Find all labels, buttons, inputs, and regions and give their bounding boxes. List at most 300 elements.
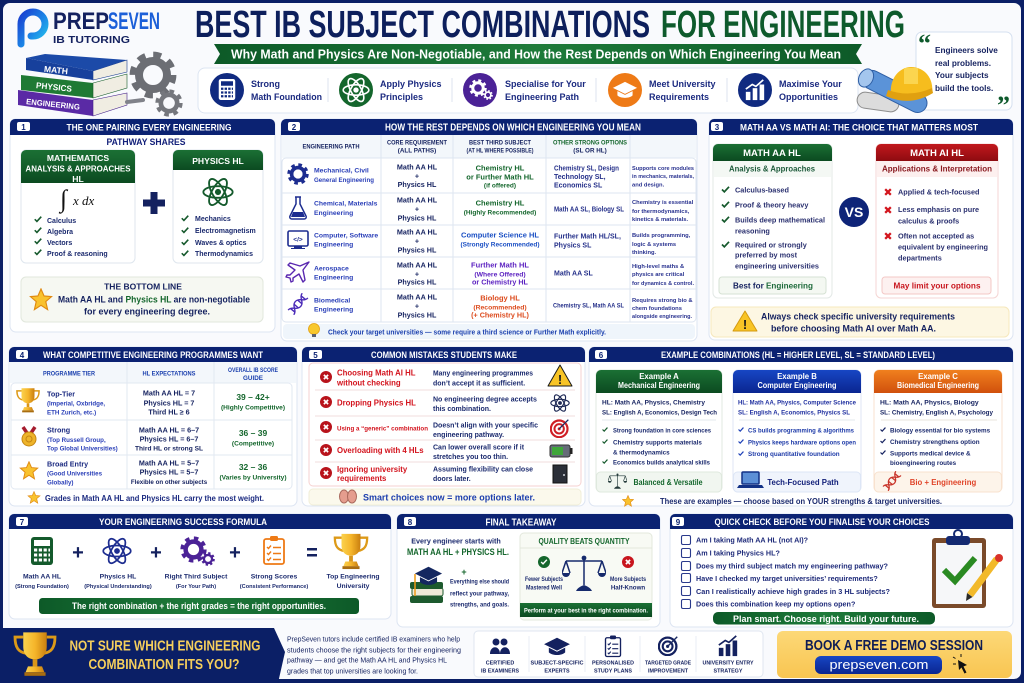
row: broad entry: Flexible on other subjects — [131, 479, 208, 486]
row: broad entry: Globally) — [47, 480, 73, 486]
row: aerospace: + — [415, 270, 419, 278]
pillar: specialise for engineering path: Specialise for Your — [505, 79, 586, 89]
mistake: dropping physics: No engineering degree accepts — [433, 396, 537, 404]
mistake: dropping physics — [320, 393, 569, 413]
mistake: choosing Math AI: ! — [558, 372, 562, 387]
formula: right third subject — [165, 538, 228, 590]
feature: grade improvement: IMPROVEMENT — [648, 668, 689, 674]
mistake: dropping physics: Dropping Physics HL — [337, 398, 416, 408]
feature: certified examiners: CERTIFIED — [486, 660, 514, 666]
panel 3: Math AA vs Math AI — [709, 119, 1013, 340]
row: mechanical: Economics SL — [554, 182, 603, 190]
card: Math AA HL: Required or strongly — [735, 240, 808, 250]
formula: Math AA HL: (Strong Foundation) — [15, 584, 69, 590]
card: Math AI HL — [876, 144, 998, 298]
card: example A: & thermodynamics — [613, 450, 670, 456]
row: biomedical: Chemistry SL, Math AA SL — [553, 302, 624, 310]
card: example B: CS builds programming & algorithms — [748, 428, 854, 434]
VS badge: VS — [845, 204, 863, 220]
formula: Math AA HL: Math AA HL — [23, 574, 61, 580]
mistake: overloading: Can lower overall score if it — [433, 444, 525, 452]
callout: the bottom line: for every engineering degree. — [84, 306, 210, 316]
text: everything else: reflect your pathway, — [450, 590, 509, 598]
footer: description text: PrepSeven tutors include certified IB examiners who help — [287, 634, 460, 644]
feature: university strategy: STRATEGY — [714, 668, 743, 674]
card: example C: Biology essential for bio systems — [890, 428, 991, 434]
card: example C: Chemistry strengthens option — [890, 439, 980, 446]
row: mechanical: or Further Math HL — [466, 172, 534, 182]
row: biomedical: Biomedical — [314, 298, 350, 304]
feature: grade improvement — [645, 637, 691, 674]
panel 8: final takeaway — [397, 514, 660, 627]
icon: stacked subject books and gears: MATH — [44, 64, 68, 76]
card: Mathematics AA HL: MATHEMATICS — [47, 153, 109, 163]
card: example B: Example B — [777, 372, 817, 381]
panel 9 header — [670, 514, 1013, 529]
row: top-tier: Top-Tier — [47, 390, 75, 398]
card: example A: Balanced & Versatile — [634, 478, 703, 487]
pillar: maximise opportunities: Maximise Your — [779, 79, 842, 89]
row: strong: Strong — [47, 426, 70, 434]
mistake: generic combination: engineering pathway. — [433, 432, 504, 439]
panel 2 header: HOW THE REST DEPENDS ON WHICH ENGINEERING YOU MEAN — [385, 122, 641, 134]
row: biomedical: (+ Chemistry HL) — [471, 310, 529, 320]
row: mechanical: in mechanics, materials, — [632, 174, 694, 180]
card: example C: Biomedical Engineering — [897, 381, 979, 390]
row: strong: Physics HL = 6–7 — [140, 434, 198, 444]
equals — [307, 548, 317, 556]
pillar: apply physics principles: Principles — [380, 92, 423, 102]
card: Mathematics AA HL: ∫ — [58, 186, 68, 214]
logo: PrepSeven: IB TUTORING — [53, 34, 130, 46]
card: Mathematics AA HL: Calculus — [47, 218, 76, 225]
card: Math AA HL: engineering universities — [735, 262, 819, 270]
row: broad entry: (Varies by University) — [219, 474, 287, 482]
banner: plan smart: Plan smart. Choose right. Build your future. — [733, 614, 919, 625]
callout: the bottom line — [21, 277, 263, 322]
card: Math AA HL: Builds deep mathematical — [735, 216, 825, 224]
mistake: ignoring requirements: requirements — [337, 474, 387, 483]
feature: subject experts: SUBJECT-SPECIFIC — [530, 660, 584, 666]
card: example B: HL: Math AA, Physics, Computer Science — [738, 400, 856, 406]
row: computer: Further Math HL/SL, — [554, 234, 621, 240]
callout: check target universities — [283, 324, 695, 339]
mistake: overloading: stretches you too thin. — [433, 454, 508, 461]
formula: strong scores: (Consistent Performance) — [240, 584, 308, 590]
icon: stacked subject books and gears: PHYSICS — [36, 80, 73, 94]
row: broad entry: Physics HL = 5–7 — [140, 468, 198, 476]
row: broad entry: Broad Entry — [47, 460, 88, 468]
panel 4: competitive programmes — [9, 347, 297, 506]
card: example A: Mechanical Engineering — [618, 381, 700, 390]
row: aerospace: for dynamics & control. — [632, 281, 694, 287]
row: top-tier: Physics HL = 7 — [144, 398, 194, 408]
footnote: examples only: These are examples — choose based on YOUR strengths & target universities. — [660, 497, 942, 506]
row: chemical: (Highly Recommended) — [464, 210, 536, 216]
statement — [407, 536, 509, 557]
row: aerospace: Aerospace — [314, 266, 349, 272]
row: computer: (Strongly Recommended) — [460, 242, 540, 248]
card: Math AI HL: Often not accepted as — [898, 232, 974, 240]
callout: smart choices: Smart choices now = more options later. — [363, 492, 535, 504]
row: chemical: kinetics & materials. — [632, 217, 688, 223]
pillar: strong math foundation: Math Foundation — [251, 92, 322, 102]
quote box: build the tools. — [935, 84, 993, 93]
quote box: real problems. — [935, 59, 991, 68]
row: chemical: for thermodynamics, — [632, 209, 690, 215]
feature: certified examiners — [481, 638, 519, 674]
row: computer: Builds programming, — [632, 233, 691, 239]
panel 5 header: 5 — [313, 351, 318, 360]
card: example B: SL: English A, Economics, Physics SL — [738, 410, 850, 416]
banner: right combination — [39, 598, 359, 614]
table column headings: BEST THIRD SUBJECT — [469, 140, 531, 146]
formula: Math AA HL — [15, 537, 69, 590]
row: mechanical: Technology SL, — [554, 174, 606, 181]
row: broad entry: Math AA HL = 5–7 — [139, 458, 199, 468]
card: quality beats quantity: Mastered Well — [526, 584, 562, 592]
row: top-tier: 39 – 42+ — [236, 392, 270, 402]
card: example A: HL: Math AA, Physics, Chemistry — [602, 400, 705, 406]
card: Math AI HL: Applications & Interpretation — [882, 164, 992, 174]
feature: study plans: PERSONALISED — [592, 660, 634, 666]
row: computer: Physics HL — [398, 246, 437, 254]
panel 5 header — [302, 347, 585, 362]
footer: description text: pathway — and get the Math AA HL and Physics HL — [287, 656, 447, 664]
row: mechanical: Chemistry SL, Design — [554, 166, 619, 172]
card: example A — [596, 370, 722, 492]
row: strong: 36 – 39 — [239, 428, 267, 438]
card: example C: Example C — [918, 372, 958, 381]
quote box: Engineers solve — [935, 46, 998, 55]
card: example C: Supports medical device & — [890, 450, 971, 458]
row: top-tier: (Highly Competitive) — [221, 404, 285, 412]
pillar: meet university requirements — [608, 73, 716, 107]
table column headings: CORE REQUIREMENT — [387, 140, 447, 146]
row: computer: logic & systems — [632, 242, 676, 248]
card: example A: SL: English A, Economics, Design Tech — [602, 410, 717, 416]
quote box — [916, 29, 1012, 120]
mistake: generic combination: Using a “generic” combination — [337, 426, 428, 432]
icon: blueprints and hard hat — [855, 66, 933, 116]
panel 6: example combinations — [589, 347, 1013, 506]
table column headings: OTHER STRONG OPTIONS — [553, 140, 627, 146]
logo: PrepSeven: SEVEN — [108, 8, 160, 35]
pillar: apply physics principles: Apply Physics — [380, 79, 442, 89]
plus: + — [72, 542, 84, 564]
mistake: ignoring requirements: doors later. — [433, 476, 471, 483]
mistake: choosing Math AI: Choosing Math AI HL — [337, 368, 416, 378]
panel 4 header: WHAT COMPETITIVE ENGINEERING PROGRAMMES WANT — [43, 350, 263, 361]
formula: Physics HL: Physics HL — [100, 574, 136, 580]
mistake: ignoring requirements: Ignoring university — [337, 465, 408, 474]
panel 1 sub-heading: PATHWAY SHARES — [106, 137, 186, 148]
callout: always check requirements: ! — [743, 317, 747, 332]
card: Math AI HL: Applied & tech-focused — [898, 188, 980, 196]
row: top-tier: (Imperial, Oxbridge, — [47, 400, 105, 408]
text: everything else: strengths, and goals. — [450, 602, 509, 608]
checklist — [682, 536, 890, 608]
callout: the bottom line: THE BOTTOM LINE — [104, 282, 182, 292]
text: everything else — [450, 567, 509, 608]
row: chemical: Engineering — [314, 210, 353, 217]
card: Math AA HL: Analysis & Approaches — [729, 164, 815, 174]
panel 2 header: 2 — [292, 123, 297, 132]
card: quality beats quantity: More Subjects — [610, 576, 646, 583]
row: biomedical: chem foundations — [632, 306, 682, 312]
row: mechanical: Chemistry HL — [476, 164, 525, 172]
text: everything else: Everything else should — [450, 578, 509, 586]
subtitle ribbon: Why Math and Physics Are Non-Negotiable, and How the Rest Depends on Which Engineering You Mean — [231, 46, 841, 62]
row: mechanical: Math AA HL — [397, 162, 438, 172]
panel 6 header — [589, 347, 1013, 362]
quote box: ” — [997, 91, 1010, 120]
mistake: ignoring requirements: Assuming flexibility can close — [433, 466, 533, 474]
panel 1: the one pairing — [10, 119, 275, 332]
table grid — [11, 362, 292, 489]
row: computer: Engineering — [314, 242, 353, 248]
pillar: specialise for engineering path: Engineering Path — [505, 92, 579, 102]
row: biomedical: + — [415, 302, 419, 310]
pillar: specialise for engineering path — [463, 73, 586, 107]
table grid — [282, 135, 696, 322]
card: Math AI HL: equivalent by engineering — [898, 242, 988, 252]
row: aerospace: Physics HL — [398, 278, 437, 286]
panel 7 header — [9, 514, 391, 529]
formula: right third subject: Right Third Subject — [165, 574, 228, 580]
table headings: HL EXPECTATIONS — [142, 370, 196, 378]
banner: right combination: The right combination + the right grades = the right opportunities. — [72, 601, 326, 611]
row: aerospace: Further Math HL — [471, 260, 529, 270]
row: strong: (Top Russell Group, — [47, 437, 106, 444]
table column headings — [282, 135, 696, 158]
row: biomedical: alongside engineering. — [632, 314, 692, 320]
row: biomedical: Biology HL — [480, 294, 520, 302]
row: computer: Math AA HL — [397, 228, 438, 236]
callout: always check requirements: before choosing Math AI over Math AA. — [771, 324, 936, 334]
logo: PrepSeven — [21, 8, 160, 46]
mistake: ignoring requirements — [320, 465, 567, 483]
footer: description text: grades that top universities are looking for. — [287, 666, 418, 676]
row: mechanical — [289, 162, 694, 190]
card: Math AI HL: Less emphasis on pure — [898, 205, 979, 214]
panel 2: how the rest depends — [281, 119, 697, 341]
table headings: PROGRAMME TIER — [43, 370, 95, 378]
row: mechanical: + — [415, 172, 419, 180]
table column headings: (AT HL WHERE POSSIBLE) — [466, 148, 534, 154]
card: Mathematics AA HL: Algebra — [47, 229, 73, 236]
card: Mathematics AA HL: x dx — [72, 193, 95, 208]
mistake: choosing Math AI: Many engineering programmes — [433, 370, 533, 378]
panel 8 header: 8 — [408, 518, 413, 527]
checklist: Can I realistically achieve high grades in 3 HL subjects? — [696, 587, 890, 596]
card: Math AA HL: Best for Engineering — [733, 280, 813, 290]
row: top-tier — [17, 388, 285, 416]
card: example C: bioengineering routes — [890, 460, 957, 467]
panel 5 header: COMMON MISTAKES STUDENTS MAKE — [371, 350, 517, 361]
panel 7 header: 7 — [20, 518, 25, 527]
row: top-tier: ETH Zurich, etc.) — [47, 410, 96, 416]
plus: + — [150, 542, 162, 564]
card: Physics HL — [173, 150, 263, 263]
panel 3 header — [709, 119, 1013, 135]
panel 4 header: 4 — [20, 351, 25, 360]
panel 1 header — [10, 119, 275, 135]
table headings — [10, 362, 296, 383]
panel 8 header — [397, 514, 660, 529]
footer: call to action banner: COMBINATION FITS YOU? — [88, 657, 240, 673]
plus: + — [229, 542, 241, 564]
VS badge — [839, 197, 869, 227]
card: example B: Strong quantitative foundation — [748, 451, 840, 458]
table column headings: (ALL PATHS) — [398, 148, 436, 154]
card: example A: Chemistry supports materials — [613, 440, 702, 446]
card: Math AA HL: MATH AA HL — [743, 148, 801, 159]
card: quality beats quantity: Fewer Subjects — [525, 576, 563, 583]
row: aerospace: High-level maths & — [632, 264, 684, 270]
formula: strong scores: Strong Scores — [251, 574, 297, 580]
row: mechanical: Mechanical, Civil — [314, 168, 369, 174]
title: FOR ENGINEERING — [661, 4, 905, 46]
panel 4 header — [9, 347, 297, 362]
panel 9 header: QUICK CHECK BEFORE YOU FINALISE YOUR CHOICES — [714, 517, 930, 528]
pillar: meet university requirements: Requirements — [649, 92, 709, 102]
pillar: apply physics principles — [339, 73, 442, 107]
panel 5: common mistakes — [302, 347, 585, 506]
callout: check target universities: Check your target universities — some require a third science or Further Math explicitly. — [328, 328, 606, 336]
card: quality beats quantity — [520, 533, 652, 620]
row: computer: </> — [293, 236, 303, 244]
card: Mathematics AA HL: Vectors — [47, 240, 72, 247]
table column headings: ENGINEERING PATH — [302, 144, 360, 150]
card: Math AA HL — [713, 144, 832, 298]
card: Physics HL: PHYSICS HL — [192, 156, 244, 166]
mistakes box — [309, 363, 581, 486]
card: example B: Computer Engineering — [758, 381, 837, 390]
row: aerospace: Math AA HL — [397, 260, 438, 270]
formula: Physics HL: (Physical Understanding) — [84, 584, 152, 590]
formula: top engineering university — [326, 534, 380, 590]
mistake: generic combination — [320, 420, 568, 439]
panel 6 header: 6 — [599, 351, 604, 360]
panel 7 header: YOUR ENGINEERING SUCCESS FORMULA — [99, 517, 267, 528]
card: Physics HL: Mechanics — [195, 216, 231, 223]
panel 3 header: 3 — [715, 123, 720, 132]
row: mechanical: (if offered) — [484, 182, 516, 190]
row: top-tier: Third HL ≥ 6 — [148, 408, 190, 416]
row: mechanical: Supports core modules — [632, 166, 694, 172]
card: Physics HL: Electromagnetism — [195, 228, 256, 235]
card: Physics HL: Thermodynamics — [195, 251, 253, 258]
table column headings: (SL OR HL) — [573, 148, 607, 154]
feature: study plans: STUDY PLANS — [594, 668, 632, 674]
card: example B: Physics keeps hardware options open — [748, 440, 856, 446]
card: Math AI HL: departments — [898, 254, 942, 262]
panel 6 header: EXAMPLE COMBINATIONS (HL = HIGHER LEVEL, SL = STANDARD LEVEL) — [661, 350, 935, 361]
formula: top engineering university: Top Engineering — [326, 574, 380, 580]
icon: stacked subject books and gears — [18, 54, 181, 116]
card: Mathematics AA HL: HL — [72, 174, 84, 184]
card: example C: HL: Math AA, Physics, Biology — [880, 400, 979, 406]
row: broad entry: 32 – 36 — [239, 462, 267, 472]
logo: PrepSeven: PREP — [53, 8, 109, 35]
row: mechanical: Physics HL — [398, 180, 437, 189]
panel 9 header: 9 — [676, 518, 681, 527]
feature: university strategy — [702, 636, 754, 674]
callout: the bottom line: Math AA HL and Physics HL are non-negotiable — [58, 294, 250, 304]
row: biomedical: Engineering — [314, 306, 353, 314]
panel: five pillars bar — [198, 68, 858, 113]
checklist: Am I taking Math AA HL (not AI)? — [696, 536, 808, 544]
row: chemical — [290, 196, 694, 223]
row: chemical: Chemistry HL — [476, 198, 525, 208]
checklist: Am I taking Physics HL? — [696, 548, 780, 558]
pillar: strong math foundation: Strong — [251, 79, 280, 89]
row: aerospace: physics are critical — [632, 272, 685, 278]
card: Math AA HL: Proof & theory heavy — [735, 200, 809, 210]
card: example A: Strong foundation in core sciences — [613, 428, 711, 434]
panel 3 header: MATH AA VS MATH AI: THE CHOICE THAT MATTERS MOST — [740, 122, 978, 134]
panel 1 header: 1 — [21, 123, 26, 132]
text: everything else: + — [461, 567, 467, 577]
row: chemical: Chemical, Materials — [314, 200, 378, 208]
formula: Physics HL — [84, 536, 152, 590]
feature: grade improvement: TARGETED GRADE — [645, 660, 691, 666]
row: computer: thinking. — [632, 250, 657, 256]
row: computer: Physics SL — [554, 242, 592, 250]
row: strong: Math AA HL = 6–7 — [139, 426, 199, 434]
row: mechanical: and design. — [632, 182, 665, 188]
pillar: maximise opportunities: Opportunities — [779, 92, 838, 102]
row: broad entry — [20, 458, 287, 486]
row: computer: Computer, Software — [314, 232, 378, 240]
mistake: choosing Math AI: without checking — [336, 378, 401, 388]
card: Math AA HL: Calculus-based — [735, 186, 789, 194]
card: example B — [733, 370, 861, 492]
row: chemical: + — [415, 204, 419, 214]
card: example C: SL: Chemistry, English A, Psychology — [880, 410, 993, 416]
row: biomedical: (Recommended) — [473, 304, 527, 312]
mistake: overloading: Overloading with 4 HLs — [337, 446, 424, 455]
quote box: “ — [918, 29, 931, 58]
row: mechanical: General Engineering — [314, 177, 374, 184]
quote box: Your subjects — [935, 71, 989, 80]
card: example B: Tech-Focused Path — [767, 478, 839, 487]
feature: university strategy: UNIVERSITY ENTRY — [702, 660, 754, 666]
card: quality beats quantity: Perform at your best in the right combination. — [524, 608, 648, 614]
row: aerospace: Math AA SL — [554, 270, 593, 278]
panel 7: success formula — [9, 514, 391, 619]
mistake: choosing Math AI — [320, 365, 572, 388]
title: BEST IB SUBJECT COMBINATIONS — [195, 4, 650, 46]
feature: certified examiners: IB EXAMINERS — [481, 668, 519, 674]
footnote: grades carry weight: Grades in Math AA HL and Physics HL carry the most weight. — [45, 494, 264, 503]
card: Math AI HL: calculus & proofs — [898, 216, 959, 226]
footer: book demo button: prepseven.com — [830, 657, 928, 672]
card: example C: Bio + Engineering — [910, 478, 976, 487]
card: Math AA HL: preferred by most — [735, 250, 798, 260]
card: Math AA HL: reasoning — [735, 226, 770, 236]
icon: graduation cap on books — [410, 566, 443, 603]
footer: book demo button: BOOK A FREE DEMO SESSION — [805, 638, 983, 654]
row: aerospace: or Chemistry HL — [472, 278, 529, 286]
callout: smart choices — [309, 489, 581, 505]
row: strong — [22, 426, 274, 452]
panel 2 header — [281, 119, 697, 135]
statement: Every engineer starts with — [411, 536, 501, 546]
pillar: maximise opportunities — [738, 73, 842, 107]
table headings: GUIDE — [243, 375, 263, 382]
